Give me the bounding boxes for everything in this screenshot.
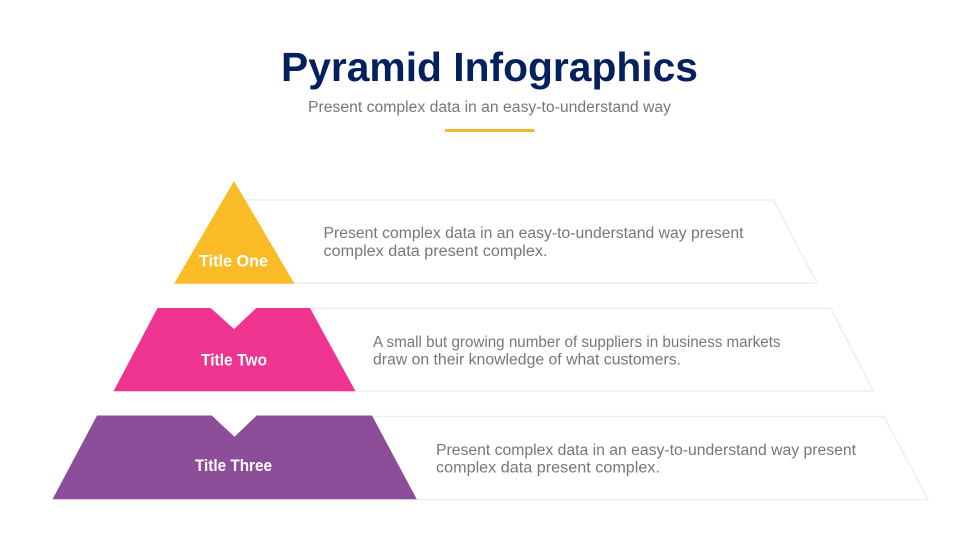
text block one: Present complex data in an easy-to-understand way present — [324, 225, 744, 242]
title: Pyramid Infographics — [281, 44, 698, 90]
subtitle: Present complex data in an easy-to-understand way — [308, 99, 671, 116]
icon: purple trapezoid — [52, 416, 417, 499]
panel: tier one — [174, 181, 817, 284]
text panel outline one — [240, 200, 817, 283]
text block two: draw on their knowledge of what customers. — [373, 352, 681, 368]
text block three: complex data present complex. — [436, 460, 660, 476]
panel: tier three — [52, 416, 928, 500]
text block two: A small but growing number of suppliers in business markets — [373, 334, 781, 351]
text panel outline two — [300, 308, 873, 391]
icon: yellow triangle — [174, 181, 294, 284]
label: title two: Title Two — [201, 352, 267, 370]
label: title three: Title Three — [195, 457, 272, 475]
text panel outline three — [360, 416, 928, 500]
label: title one: Title One — [199, 252, 268, 270]
text block three: Present complex data in an easy-to-understand way present — [436, 442, 857, 459]
icon: pink trapezoid — [114, 308, 356, 391]
panel: tier two — [114, 308, 873, 391]
text block one: complex data present complex. — [324, 243, 548, 260]
accent line — [445, 129, 534, 132]
